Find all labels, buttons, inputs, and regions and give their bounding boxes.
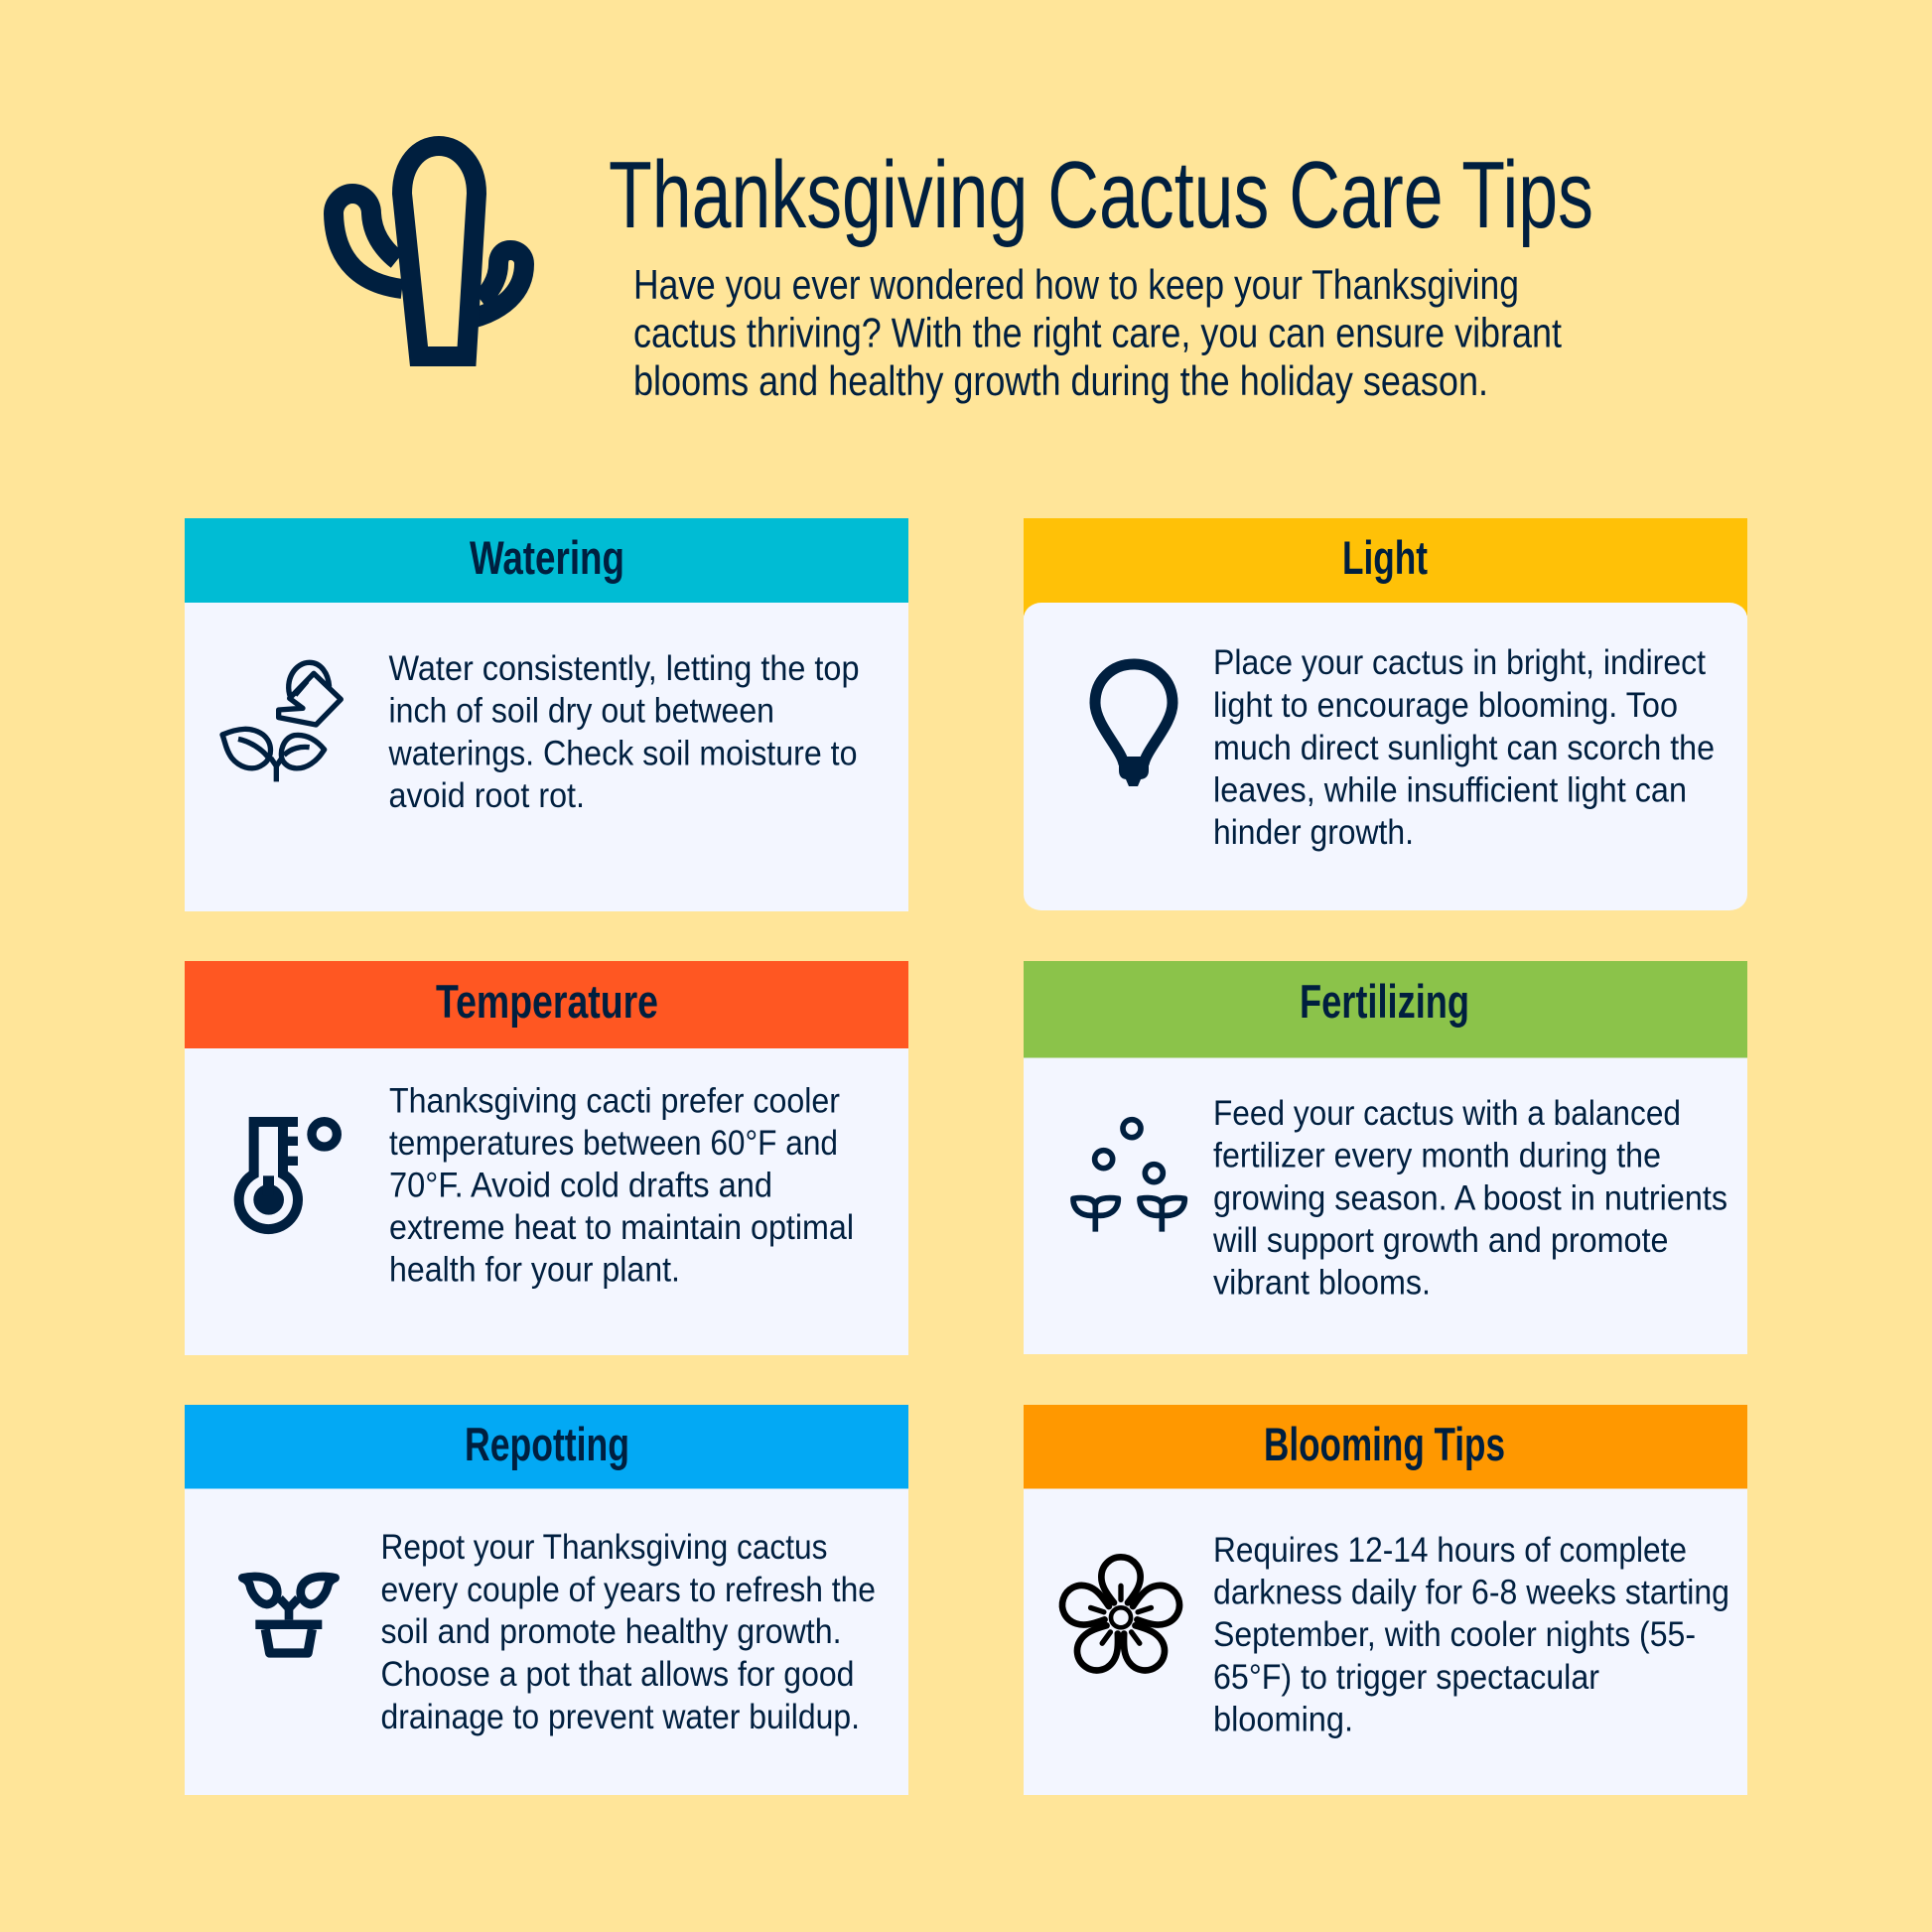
watering text: waterings. Check soil moisture to xyxy=(388,733,858,772)
intro text: Have you ever wondered how to keep your Thanksgiving xyxy=(633,261,1519,308)
icon: cactus xyxy=(334,146,524,356)
temperature text: Thanksgiving cacti prefer cooler xyxy=(389,1080,840,1120)
watering heading: Watering xyxy=(470,531,624,584)
panel: light xyxy=(1024,518,1747,910)
repotting heading: Repotting xyxy=(465,1418,629,1470)
icon: flower xyxy=(1057,1557,1184,1678)
temperature text: health for your plant. xyxy=(389,1249,680,1289)
light body xyxy=(1024,603,1747,910)
icon: potted plant xyxy=(242,1577,336,1653)
panel: blooming tips xyxy=(1024,1405,1747,1795)
repotting header bar xyxy=(185,1405,908,1489)
light heading: Light xyxy=(1342,531,1428,584)
light text: much direct sunlight can scorch the xyxy=(1213,728,1715,767)
repotting text: Repot your Thanksgiving cactus xyxy=(381,1527,828,1567)
fertilizing text: growing season. A boost in nutrients xyxy=(1213,1177,1727,1217)
fertilizing heading: Fertilizing xyxy=(1300,975,1469,1028)
watering text: avoid root rot. xyxy=(389,775,585,815)
repotting text: drainage to prevent water buildup. xyxy=(381,1697,860,1736)
repotting text: every couple of years to refresh the xyxy=(381,1570,876,1609)
blooming tips text: 65°F) to trigger spectacular xyxy=(1213,1657,1599,1697)
light header bar xyxy=(1024,518,1747,616)
temperature header bar xyxy=(185,961,908,1048)
fertilizing header bar xyxy=(1024,961,1747,1058)
blooming tips text: darkness daily for 6-8 weeks starting xyxy=(1213,1573,1729,1612)
blooming tips text: blooming. xyxy=(1213,1700,1353,1739)
panel: watering xyxy=(185,518,908,911)
light text: Place your cactus in bright, indirect xyxy=(1213,642,1706,682)
watering text: Water consistently, letting the top xyxy=(389,648,860,688)
icon: light bulb xyxy=(1095,664,1173,786)
repotting text: soil and promote healthy growth. xyxy=(381,1611,842,1651)
blooming tips text: Requires 12-14 hours of complete xyxy=(1213,1530,1687,1570)
blooming tips header bar xyxy=(1024,1405,1747,1489)
watering text: inch of soil dry out between xyxy=(389,691,774,731)
repotting text: Choose a pot that allows for good xyxy=(381,1654,854,1694)
temperature text xyxy=(389,1080,854,1289)
repotting text xyxy=(381,1527,876,1736)
watering header bar xyxy=(185,518,908,603)
temperature text: extreme heat to maintain optimal xyxy=(389,1207,854,1247)
intro text xyxy=(633,261,1562,404)
fertilizing text: fertilizer every month during the xyxy=(1213,1136,1661,1175)
icon: thermometer xyxy=(239,1122,337,1229)
blooming tips text: September, with cooler nights (55- xyxy=(1213,1614,1696,1654)
light text: leaves, while insufficient light can xyxy=(1213,770,1687,810)
fertilizing text xyxy=(1212,1093,1727,1303)
intro text: cactus thriving? With the right care, you can ensure vibrant xyxy=(633,310,1562,355)
icon: watering can and sprout xyxy=(222,662,341,781)
temperature text: 70°F. Avoid cold drafts and xyxy=(389,1166,772,1205)
light text xyxy=(1213,642,1715,852)
panel: temperature xyxy=(185,961,908,1355)
light text: hinder growth. xyxy=(1213,812,1414,852)
temperature heading: Temperature xyxy=(436,975,658,1028)
icon: sprouts and fertilizer granules xyxy=(1073,1120,1184,1232)
temperature text: temperatures between 60°F and xyxy=(389,1123,838,1163)
light text: light to encourage blooming. Too xyxy=(1213,685,1678,725)
fertilizing text: vibrant blooms. xyxy=(1213,1263,1431,1303)
fertilizing text: Feed your cactus with a balanced xyxy=(1213,1093,1681,1133)
blooming tips heading: Blooming Tips xyxy=(1264,1418,1505,1470)
panel: repotting xyxy=(185,1405,908,1795)
fertilizing text: will support growth and promote xyxy=(1212,1220,1668,1260)
panel: fertilizing xyxy=(1024,961,1747,1354)
blooming tips text xyxy=(1213,1530,1729,1739)
watering text xyxy=(388,648,860,815)
intro text: blooms and healthy growth during the holiday season. xyxy=(633,357,1488,404)
title: Thanksgiving Cactus Care Tips xyxy=(609,142,1593,248)
